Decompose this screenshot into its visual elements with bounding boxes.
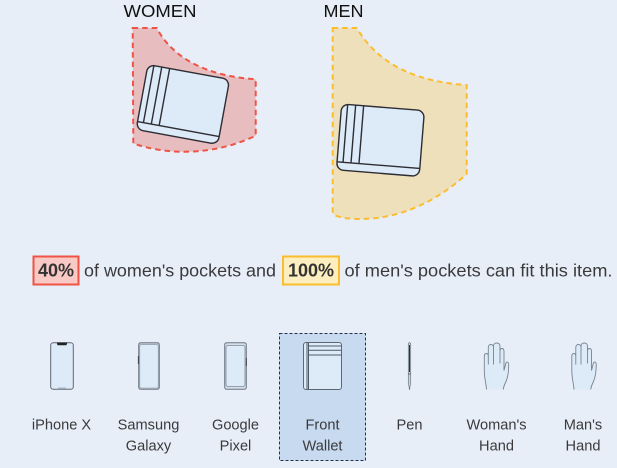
icon: pen [408, 342, 411, 390]
men's pocket shape [333, 28, 467, 219]
label: Google Pixel: Google [212, 418, 259, 434]
item: Pen [397, 342, 422, 434]
stat sentence [34, 256, 612, 284]
label: Pen: Pen [397, 418, 422, 434]
badge: 100% men [283, 256, 339, 284]
item: Google Pixel: Pixel [220, 438, 251, 454]
item: Man's Hand [564, 343, 602, 454]
wallet in men's pocket [336, 104, 424, 176]
item: Google Pixel [212, 343, 259, 454]
icon: Google Pixel [225, 343, 246, 389]
text: of women's pockets and: of women's pockets and [84, 260, 276, 280]
icon: front wallet [304, 342, 342, 390]
icon: Samsung Galaxy [138, 343, 159, 389]
item: Samsung Galaxy: Galaxy [126, 438, 172, 454]
badge: 100% men: 100% [288, 260, 334, 280]
heading: men: MEN [324, 1, 364, 21]
label: Samsung Galaxy: Samsung [118, 418, 179, 434]
text: of men's pockets can fit this item.: of men's pockets can fit this item. [344, 260, 612, 280]
item: Front Wallet (selected): Wallet [302, 438, 343, 454]
label: Woman's Hand: Woman's [466, 418, 527, 434]
wallet in women's pocket [136, 64, 230, 144]
women's pocket shape [133, 28, 256, 152]
selected highlight box [280, 334, 366, 460]
heading: women: WOMEN [124, 1, 196, 21]
label: Front Wallet: Front [305, 418, 340, 434]
icon: iPhone X [51, 342, 73, 389]
item: Woman's Hand [466, 343, 527, 454]
item: Samsung Galaxy [118, 343, 179, 454]
item: iPhone X [32, 342, 91, 434]
badge: 40% women [34, 256, 78, 284]
item: Front Wallet (selected) [280, 334, 366, 460]
label: Man's Hand: Man's [564, 418, 602, 434]
item: Woman's Hand: Hand [479, 438, 514, 454]
badge: 40% women: 40% [38, 260, 74, 280]
label: iPhone X: iPhone X [32, 418, 91, 434]
item: Man's Hand: Hand [566, 438, 600, 454]
icon: woman's hand [484, 343, 509, 390]
icon: man's hand [572, 343, 596, 390]
